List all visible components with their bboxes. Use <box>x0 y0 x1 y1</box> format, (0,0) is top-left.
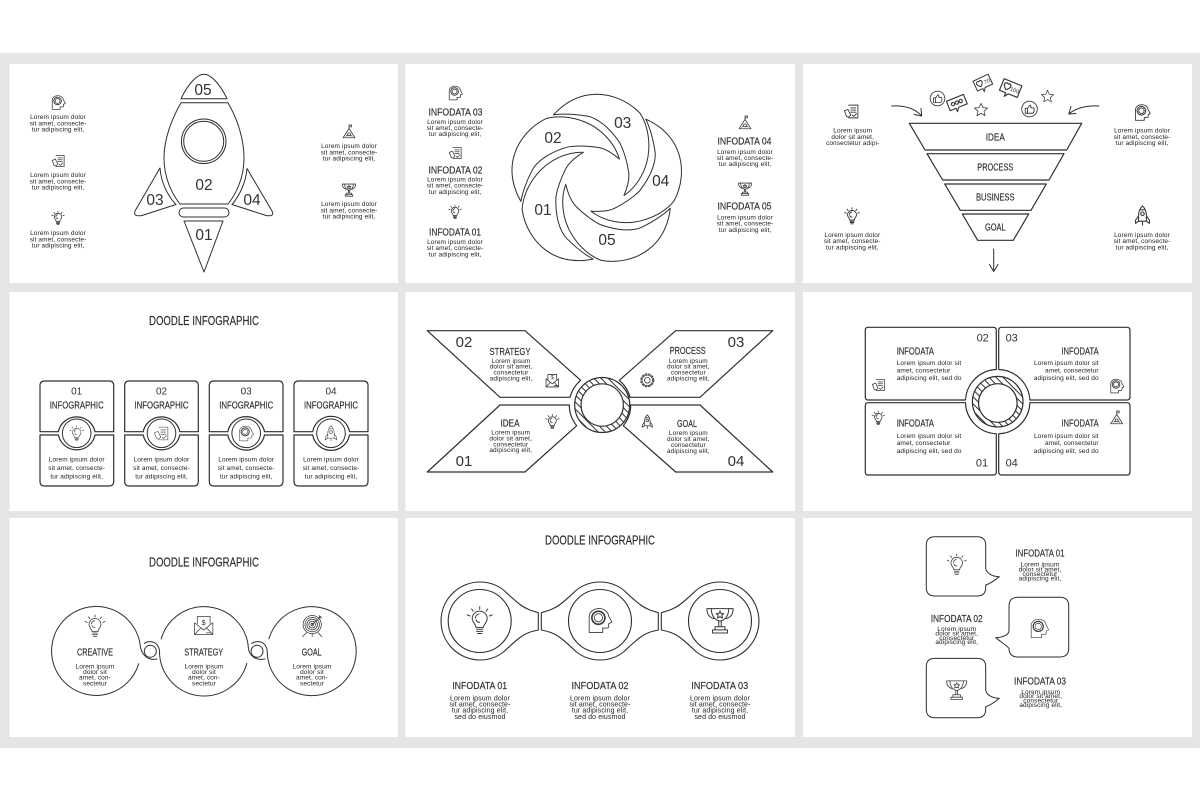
card 03: INFOGRAPHIC <box>219 399 274 411</box>
block: infodata 03: Lorem ipsum dolor <box>690 696 751 702</box>
block: infodata 04: tur adipiscing elit, <box>719 161 771 168</box>
idea text <box>489 417 532 454</box>
card 02: Lorem ipsum dolor <box>134 456 190 463</box>
text: quadrant bottom right: adipiscing elit, sed do <box>1034 448 1099 455</box>
text: quadrant bottom left: adipiscing elit, sed do <box>897 448 962 455</box>
text: quadrant top right: adipiscing elit, sed do <box>1034 375 1099 382</box>
text: funnel bottom left: sit amet, consecte- <box>824 238 881 245</box>
icon: document <box>844 105 858 118</box>
block: infodata 01 <box>427 226 484 258</box>
block: infodata 01 <box>1016 548 1065 583</box>
block: infodata 03: sit amet, consecte- <box>427 125 483 132</box>
rocket numbers: 01 <box>195 227 213 244</box>
card 01: INFOGRAPHIC <box>50 399 104 411</box>
process text: Lorem ipsum <box>669 358 708 365</box>
block: infodata 04: Lorem ipsum dolor <box>717 149 774 156</box>
block: infodata 02: INFODATA 02 <box>428 165 483 177</box>
text: quadrant bottom right <box>1034 417 1099 455</box>
card 02 <box>125 381 198 486</box>
idea text: adipiscing elit, <box>489 447 532 454</box>
text: quadrant bottom left: INFODATA <box>897 417 934 429</box>
block: infodata 02: INFODATA 02 <box>572 680 629 692</box>
social icons: 70 <box>983 78 992 86</box>
text block: rocket right 1: sit amet, consecte- <box>321 150 377 156</box>
icon: gear <box>641 374 654 387</box>
card 02: 02 <box>156 386 167 397</box>
text: quadrant top left: Lorem ipsum dolor sit <box>897 360 961 367</box>
card 02: sit amet, consecte- <box>133 465 190 472</box>
goal text: dolor sit amet, <box>667 436 710 443</box>
text: quadrant bottom right: Lorem ipsum dolor sit <box>1034 433 1099 440</box>
icon: trophy <box>947 681 967 700</box>
icon: document <box>52 155 64 167</box>
text: quadrant top right <box>1034 345 1099 382</box>
lens shapes <box>441 582 759 660</box>
process text: adipiscing elit, <box>667 376 710 382</box>
text: funnel bottom right: Lorem ipsum dolor <box>1114 232 1171 239</box>
strategy text: amet, con- <box>188 674 220 682</box>
text block: rocket left 2: tur adipiscing elit, <box>32 184 84 192</box>
text: quadrant top left: INFODATA <box>897 345 934 357</box>
block: infodata 01: Lorem ipsum dolor <box>427 239 484 246</box>
title: DOODLE INFOGRAPHIC <box>149 314 259 328</box>
block: infodata 03: sed do eiusmod <box>694 714 746 721</box>
card 01: Lorem ipsum dolor <box>49 456 105 463</box>
icon: bulb <box>947 554 966 574</box>
block: infodata 02: adipiscing elit, <box>935 639 978 646</box>
block: infodata 03: INFODATA 03 <box>1014 675 1066 687</box>
text block: rocket right 2: sit amet, consecte- <box>321 208 377 214</box>
funnel labels: IDEA <box>986 131 1005 143</box>
idea text: Lorem ipsum <box>491 430 530 436</box>
text: quadrant top left: amet, consectetur <box>897 368 951 374</box>
text block: rocket right 2 <box>321 201 378 220</box>
strategy text: dolor sit amet, <box>490 364 532 371</box>
text: funnel bottom left: Lorem ipsum dolor <box>824 232 881 239</box>
card 04: 04 <box>325 386 337 397</box>
block: infodata 03 <box>427 107 484 138</box>
goal text <box>293 647 331 687</box>
text: funnel top left: dolor sit amet, <box>831 134 874 141</box>
icon: flag mountain <box>343 125 355 138</box>
rocket numbers: 05 <box>194 82 212 99</box>
creative text: Lorem ipsum <box>76 663 114 670</box>
icon: bulb <box>546 414 559 429</box>
icon: flag mountain <box>739 116 751 129</box>
speech bubble 2 <box>996 597 1069 657</box>
process text <box>667 345 710 382</box>
text: funnel bottom right: tur adipiscing elit, <box>1116 244 1168 252</box>
funnel <box>909 123 1082 240</box>
arrow: down <box>990 249 998 272</box>
block: infodata 03 <box>689 680 751 721</box>
block: infodata 01: INFODATA 01 <box>452 680 507 692</box>
text: quadrant top left <box>897 345 962 382</box>
speech bubble 3 <box>926 658 999 718</box>
funnel labels: BUSINESS <box>976 191 1015 203</box>
panel: rocket infographic <box>10 64 398 283</box>
block: infodata 04: sit amet, consecte- <box>717 155 773 162</box>
block: infodata 02: consectetur <box>939 635 975 642</box>
card 04: sit amet, consecte- <box>303 465 359 472</box>
panel: three linked circles <box>10 518 398 737</box>
text block: rocket left 3: sit amet, consecte- <box>30 236 86 244</box>
icon: document <box>449 147 461 159</box>
block: infodata 01: Lorem ipsum dolor <box>450 696 511 702</box>
block: infodata 04: INFODATA 04 <box>718 135 772 147</box>
block: infodata 02: tur adipiscing elit, <box>572 708 628 714</box>
text: funnel top right: sit amet, consecte- <box>1114 134 1170 141</box>
text block: rocket right 1: Lorem ipsum dolor <box>321 143 378 150</box>
goal text: Lorem ipsum <box>669 430 708 437</box>
card 04: Lorem ipsum dolor <box>303 456 360 463</box>
block: infodata 03: tur adipiscing elit, <box>692 708 748 714</box>
strategy text <box>184 647 223 687</box>
block: infodata 01 <box>449 680 511 721</box>
block: infodata 05: INFODATA 05 <box>718 201 772 213</box>
icon: flag mountain <box>1111 411 1123 424</box>
idea text: IDEA <box>500 417 520 429</box>
text: quadrant top right: INFODATA <box>1061 345 1099 357</box>
funnel labels: PROCESS <box>977 161 1013 173</box>
card 02: tur adipiscing elit, <box>135 474 188 481</box>
block: infodata 02: Lorem ipsum dolor <box>427 176 484 184</box>
text block: rocket right 1: tur adipiscing elit, <box>323 156 375 162</box>
panel: funnel infographic <box>803 64 1192 283</box>
text block: rocket left 3 <box>30 230 87 250</box>
icon: trophy <box>738 183 752 195</box>
text block: rocket left 1: Lorem ipsum dolor <box>30 114 87 121</box>
bow-tie numbers: 01 <box>456 453 472 470</box>
goal text: sectetur <box>300 680 325 687</box>
social icons: 100 <box>1009 87 1020 96</box>
idea text: consectetur <box>493 441 529 448</box>
creative text: CREATIVE <box>77 647 113 659</box>
rocket diagram <box>135 74 273 272</box>
spiral numbers: 01 <box>534 202 552 219</box>
block: infodata 03: INFODATA 03 <box>428 107 483 119</box>
text: funnel top right: tur adipiscing elit, <box>1116 140 1168 147</box>
icon: head <box>589 609 612 632</box>
block: infodata 02: sit amet, consecte- <box>427 182 483 190</box>
panel: three connected lenses <box>406 518 795 737</box>
block: infodata 03: adipiscing elit, <box>1019 702 1062 709</box>
text: funnel top left: Lorem ipsum <box>833 128 872 134</box>
block: infodata 01: consectetur <box>1023 571 1058 578</box>
block: infodata 02: tur adipiscing elit, <box>429 189 481 196</box>
icon: envelope <box>546 374 559 387</box>
arrow: left curved <box>892 106 922 116</box>
goal text: Lorem ipsum <box>293 663 331 670</box>
icon: bulb <box>844 208 860 224</box>
block: infodata 03: dolor sit amet, <box>1019 693 1062 700</box>
block: infodata 03: Lorem ipsum dolor <box>427 119 484 126</box>
text: quadrant top right: amet, consectetur <box>1045 368 1099 374</box>
icon: trophy <box>342 184 356 196</box>
block: infodata 03: Lorem ipsum <box>1021 689 1060 696</box>
text: quadrant bottom right: amet, consectetur <box>1045 440 1099 447</box>
strategy text: Lorem ipsum <box>492 358 530 365</box>
goal text: GOAL <box>302 647 322 659</box>
speech bubble 1 <box>926 537 999 596</box>
bow-tie numbers: 03 <box>728 334 744 351</box>
spiral blades <box>501 94 695 281</box>
arrow: right curved <box>1069 106 1099 114</box>
process text: PROCESS <box>670 345 706 357</box>
funnel labels: GOAL <box>985 221 1006 233</box>
idea text: dolor sit amet, <box>489 435 532 442</box>
block: infodata 01: sit amet, consecte- <box>427 245 483 252</box>
card 01: tur adipiscing elit, <box>50 474 103 481</box>
card 03: 03 <box>241 386 252 397</box>
icon: bulb <box>85 615 105 636</box>
block: infodata 02 <box>427 165 484 196</box>
text: quadrant bottom left: amet, consectetur <box>897 440 951 447</box>
quadrant numbers: 01 <box>976 457 988 469</box>
icon: bulb <box>52 211 64 224</box>
block: infodata 01: tur adipiscing elit, <box>429 252 481 258</box>
rocket numbers <box>146 82 261 244</box>
strategy text: consectetur <box>494 370 529 376</box>
creative text <box>76 647 114 687</box>
card 03: tur adipiscing elit, <box>220 474 273 481</box>
icon: rocket <box>642 415 652 429</box>
goal text: adipiscing elit, <box>667 448 710 455</box>
icon: head <box>1111 379 1124 393</box>
icon: bulb <box>872 411 885 424</box>
block: infodata 02: Lorem ipsum dolor <box>570 696 631 702</box>
block: infodata 03: sit amet, consecte- <box>689 702 751 708</box>
text block: rocket left 1 <box>30 114 87 134</box>
block: infodata 02 <box>569 680 631 721</box>
text: quadrant bottom left: Lorem ipsum dolor sit <box>897 433 961 440</box>
text: quadrant bottom left <box>897 417 962 455</box>
panel: spiral infographic <box>406 64 795 283</box>
quadrant numbers: 04 <box>1006 457 1018 469</box>
text: funnel top right <box>1114 128 1171 147</box>
funnel labels <box>976 131 1015 233</box>
block: infodata 05 <box>717 201 774 234</box>
panel: speech bubbles <box>803 518 1192 737</box>
strategy text <box>490 346 532 382</box>
icon: rocket <box>1136 206 1150 225</box>
block: infodata 01: Lorem ipsum <box>1021 562 1059 568</box>
card 01: sit amet, consecte- <box>48 465 105 472</box>
text block: rocket left 1: sit amet, consecte- <box>30 120 86 128</box>
hatched ring <box>575 377 630 432</box>
icon: head <box>52 96 65 109</box>
block: infodata 01: dolor sit amet, <box>1019 566 1061 573</box>
text: funnel top left <box>826 128 879 147</box>
panel: bow-tie infographic <box>406 292 795 511</box>
text: quadrant top left: adipiscing elit, sed do <box>897 375 962 382</box>
text block: rocket right 2: Lorem ipsum dolor <box>321 201 378 208</box>
quadrant numbers: 02 <box>977 332 989 344</box>
goal text: dolor sit <box>300 669 324 676</box>
rocket numbers: 04 <box>243 192 261 209</box>
icon: target <box>303 615 322 637</box>
block: infodata 01: adipiscing elit, <box>1019 576 1061 583</box>
block: infodata 02: Lorem ipsum <box>937 626 976 633</box>
text: quadrant bottom right: INFODATA <box>1061 417 1099 429</box>
process text: dolor sit amet, <box>667 364 710 371</box>
card 01: 01 <box>71 386 83 397</box>
text: funnel bottom left <box>824 232 881 252</box>
card 04: tur adipiscing elit, <box>305 474 357 481</box>
bow-tie numbers <box>456 334 744 470</box>
goal text <box>667 418 710 455</box>
icon: head <box>449 86 462 100</box>
text block: rocket right 2: tur adipiscing elit, <box>323 214 375 220</box>
text: funnel bottom right <box>1114 232 1171 252</box>
spiral numbers: 05 <box>598 232 616 249</box>
block: infodata 01: sit amet, consecte- <box>449 702 511 708</box>
strategy text: STRATEGY <box>184 647 223 659</box>
card 03 <box>209 381 283 486</box>
rocket numbers: 02 <box>195 177 213 194</box>
bow-tie segments <box>427 331 773 472</box>
block: infodata 05: Lorem ipsum dolor <box>717 214 774 221</box>
spiral numbers: 04 <box>652 173 670 190</box>
quadrant numbers <box>976 332 1018 469</box>
creative text: amet, con- <box>79 674 111 682</box>
goal text: consectetur <box>671 442 706 449</box>
text block: rocket left 2: sit amet, consecte- <box>30 178 86 186</box>
panel: four cards <box>10 292 398 511</box>
icon: head <box>1031 619 1049 638</box>
icon: envelope <box>195 616 213 635</box>
social icons <box>930 74 1054 117</box>
bow-tie numbers: 04 <box>728 453 744 470</box>
quadrant numbers: 03 <box>1006 332 1018 344</box>
creative text: sectetur <box>83 680 108 687</box>
card 04: INFOGRAPHIC <box>304 399 358 411</box>
text: funnel top right: Lorem ipsum dolor <box>1114 128 1171 134</box>
icon: envelope: $ <box>202 620 206 627</box>
icon: document <box>872 379 884 391</box>
strategy text: STRATEGY <box>490 346 530 358</box>
spiral numbers <box>534 115 670 249</box>
block: infodata 03: tur adipiscing elit, <box>429 131 481 138</box>
creative text: dolor sit <box>83 669 107 676</box>
linked circle outlines <box>52 606 356 696</box>
icon: envelope: $ <box>551 375 554 381</box>
text block: rocket left 3: Lorem ipsum dolor <box>30 230 87 237</box>
block: infodata 01: INFODATA 01 <box>429 226 481 238</box>
card 01 <box>40 381 114 486</box>
strategy text: adipiscing elit, <box>490 376 532 382</box>
block: infodata 05: tur adipiscing elit, <box>719 227 771 234</box>
block: infodata 02: sed do eiusmod <box>574 714 626 721</box>
strategy text: sectetur <box>192 680 217 687</box>
block: infodata 02: sit amet, consecte- <box>569 702 631 708</box>
block: infodata 02 <box>931 613 983 646</box>
block: infodata 03: INFODATA 03 <box>691 680 748 692</box>
card 02: INFOGRAPHIC <box>134 399 189 411</box>
text block: rocket left 3: tur adipiscing elit, <box>32 242 84 250</box>
text block: rocket right 1 <box>321 143 378 162</box>
block: infodata 01: tur adipiscing elit, <box>452 708 508 714</box>
text: funnel top left: consectetur adipi- <box>826 140 879 147</box>
hatched ring <box>972 376 1023 427</box>
strategy text: dolor sit <box>192 669 216 676</box>
title: DOODLE INFOGRAPHIC <box>149 556 259 570</box>
block: infodata 01: INFODATA 01 <box>1016 548 1065 560</box>
text block: rocket left 1: tur adipiscing elit, <box>32 126 84 134</box>
block: infodata 01: sed do eiusmod <box>454 714 506 721</box>
block: infodata 04 <box>717 135 774 168</box>
icon: trophy <box>707 609 733 633</box>
bow-tie numbers: 02 <box>456 334 472 351</box>
panel: quadrant infographic <box>803 292 1192 511</box>
process text: consectetur <box>671 370 706 376</box>
goal text: amet, con- <box>296 674 328 682</box>
text: funnel bottom right: sit amet, consecte- <box>1114 238 1170 245</box>
title: DOODLE INFOGRAPHIC <box>545 534 655 548</box>
block: infodata 03 <box>1014 675 1066 709</box>
block: infodata 02: INFODATA 02 <box>931 613 983 625</box>
card 03: sit amet, consecte- <box>218 465 275 472</box>
spiral numbers: 03 <box>614 115 631 132</box>
card 03: Lorem ipsum dolor <box>218 456 275 463</box>
text block: rocket left 2 <box>30 172 87 192</box>
block: infodata 05: sit amet, consecte- <box>717 220 773 228</box>
quadrant boxes <box>865 327 1130 475</box>
icon: bulb <box>467 607 492 634</box>
text block: rocket left 2: Lorem ipsum dolor <box>30 172 87 179</box>
block: infodata 03: consectetur <box>1023 698 1059 705</box>
icon: bulb <box>449 205 461 218</box>
text: funnel bottom left: tur adipiscing elit, <box>826 244 879 252</box>
text: quadrant top right: Lorem ipsum dolor sit <box>1034 360 1099 367</box>
icon: head <box>1135 105 1150 120</box>
block: infodata 02: dolor sit amet, <box>935 630 978 638</box>
rocket numbers: 03 <box>146 192 164 209</box>
goal text: GOAL <box>677 418 697 430</box>
strategy text: Lorem ipsum <box>185 663 223 670</box>
card 04 <box>294 381 368 486</box>
spiral numbers: 02 <box>544 130 562 147</box>
